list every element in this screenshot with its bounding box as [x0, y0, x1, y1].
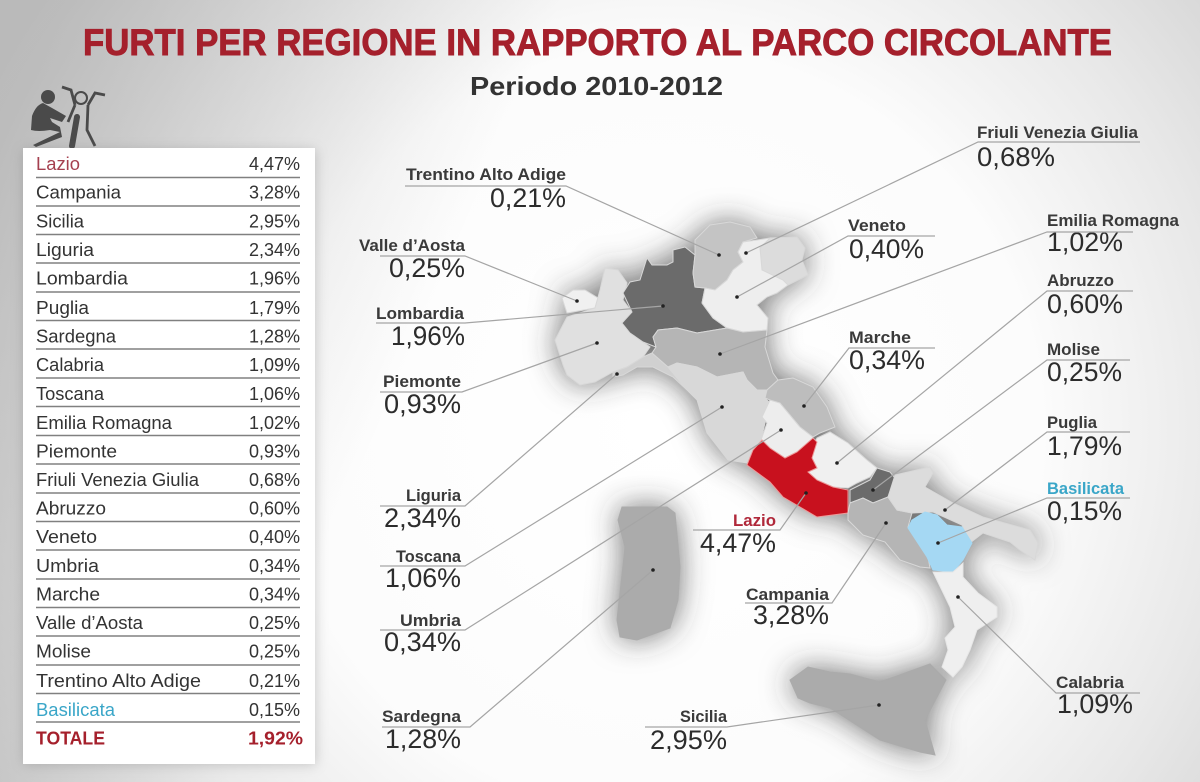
label: Lombardia [376, 304, 665, 351]
row: Puglia: 1,79% [249, 298, 300, 318]
row: Molise [36, 642, 300, 665]
row: Marche [36, 584, 300, 608]
label: Umbria [380, 428, 783, 657]
label: Veneto [735, 217, 935, 299]
row: Lombardia [36, 269, 300, 292]
label: Abruzzo [835, 272, 1133, 465]
label: Marche: Marche [849, 329, 911, 347]
row: Trentino Alto Adige [36, 671, 300, 694]
label: Campania: 3,28% [753, 600, 829, 630]
row: Valle d'Aosta: 0,25% [249, 613, 300, 633]
region: Liguria [613, 353, 687, 390]
row: Friuli Venezia Giulia: 0,68% [249, 470, 300, 490]
label: Lazio [693, 491, 808, 558]
label: Sicilia: Sicilia [680, 708, 728, 726]
label: Emilia Romagna: Emilia Romagna [1047, 212, 1180, 230]
region: Toscana [668, 363, 772, 463]
row: Piemonte [36, 442, 300, 464]
row: Umbria: 0,34% [249, 556, 300, 576]
row: Sardegna: Sardegna [36, 326, 117, 346]
row: Umbria [36, 556, 300, 579]
label: Trentino Alto Adige: Trentino Alto Adige [406, 166, 566, 184]
region: Veneto [702, 238, 788, 332]
region: Calabria [933, 563, 997, 677]
row: Campania: Campania [36, 183, 122, 203]
region: Trentino Alto Adige [693, 222, 757, 290]
label: Emilia Romagna: 1,02% [1047, 227, 1123, 257]
label: Valle d'Aosta [359, 237, 579, 303]
row: Basilicata: Basilicata [36, 700, 116, 720]
label: Lombardia: 1,96% [391, 321, 465, 351]
row: Liguria [36, 240, 300, 263]
row: Totale [36, 728, 303, 748]
row: Lazio: 4,47% [249, 154, 300, 174]
panel: ranking table [23, 148, 315, 764]
row: Toscana [36, 384, 300, 406]
map of Italy [555, 222, 1038, 755]
row: Veneto: Veneto [36, 527, 97, 547]
row: Abruzzo: 0,60% [249, 498, 300, 518]
label: Friuli Venezia Giulia: Friuli Venezia Giulia [977, 124, 1139, 142]
label: Sardegna: 1,28% [385, 724, 461, 754]
row: Toscana: 1,06% [249, 384, 300, 404]
label: Piemonte: 0,93% [384, 389, 461, 419]
region: Umbria [761, 400, 813, 458]
region: Sardegna [617, 507, 680, 640]
region: Emilia Romagna [652, 328, 778, 390]
row: Puglia [36, 298, 300, 320]
row: Basilicata: 0,15% [249, 700, 300, 720]
label: Basilicata: 0,15% [1047, 496, 1122, 526]
label: Trentino Alto Adige [405, 166, 721, 257]
row: Sicilia [36, 211, 300, 234]
label: Toscana: Toscana [396, 548, 462, 566]
row: Lazio: Lazio [36, 154, 80, 174]
label: Toscana: 1,06% [385, 563, 461, 593]
row: Calabria: Calabria [36, 355, 105, 375]
panel shadow [23, 150, 316, 765]
label: Calabria: 1,09% [1057, 689, 1133, 719]
label: Sicilia [645, 703, 881, 755]
row: Abruzzo [36, 498, 300, 522]
region: Friuli Venezia Giulia [760, 237, 808, 285]
label: Campania [745, 521, 888, 630]
row: Friuli Venezia Giulia [36, 470, 300, 493]
row: Emilia Romagna: 1,02% [249, 413, 300, 433]
label: Puglia: Puglia [1047, 414, 1098, 432]
row: Sicilia: 2,95% [249, 211, 300, 231]
title: FURTI PER REGIONE IN RAPPORTO AL PARCO CIRCOLANTE [83, 22, 1112, 63]
label: Umbria: 0,34% [384, 627, 461, 657]
label: Molise: 0,25% [1047, 357, 1122, 387]
label: Liguria: Liguria [406, 487, 462, 505]
label: Friuli Venezia Giulia: 0,68% [977, 142, 1055, 172]
label: Valle d'Aosta: Valle d’Aosta [359, 237, 466, 255]
region: Lazio [747, 438, 848, 517]
label: Lombardia: Lombardia [376, 305, 465, 323]
label: Lazio: 4,47% [700, 528, 776, 558]
row: Campania: 3,28% [249, 183, 300, 203]
label: Veneto: Veneto [848, 217, 906, 235]
label: Sardegna: Sardegna [382, 708, 462, 726]
label: Liguria [380, 372, 619, 533]
label: Calabria [956, 595, 1140, 719]
label: Trentino Alto Adige: 0,21% [490, 183, 566, 213]
label: Lazio: Lazio [733, 512, 776, 530]
label: Sicilia: 2,95% [650, 725, 727, 755]
row: Trentino Alto Adige: Trentino Alto Adige [36, 671, 201, 691]
row: Valle d'Aosta: Valle d’Aosta [36, 613, 144, 633]
region: Piemonte [555, 268, 650, 385]
region: Puglia [888, 467, 1038, 560]
label: Friuli Venezia Giulia [744, 124, 1140, 255]
map shadow [555, 222, 1038, 755]
row: Emilia Romagna: Emilia Romagna [36, 413, 173, 433]
row: Abruzzo: Abruzzo [36, 498, 106, 518]
row: Sardegna: 1,28% [249, 326, 300, 346]
region: Basilicata [908, 512, 972, 572]
label: Piemonte [380, 341, 599, 419]
subtitle: Periodo 2010-2012 [470, 71, 723, 101]
region: Valle d'Aosta [562, 290, 598, 313]
row: Molise: 0,25% [249, 642, 300, 662]
label: Liguria: 2,34% [384, 503, 461, 533]
icon: thief stealing a motorbike [31, 87, 105, 147]
row: Lombardia: Lombardia [36, 269, 129, 289]
row: Trentino Alto Adige: 0,21% [249, 671, 300, 691]
label: Molise: Molise [1047, 341, 1100, 359]
row: Valle d'Aosta [36, 613, 300, 636]
row: Veneto: 0,40% [249, 527, 300, 547]
region: Molise [850, 468, 895, 503]
row: Campania [36, 183, 300, 206]
label: Marche [802, 329, 935, 408]
row: Calabria [36, 355, 300, 378]
label: Umbria: Umbria [400, 612, 462, 630]
label: Puglia [943, 414, 1130, 512]
row: Marche: Marche [36, 584, 100, 604]
label: Puglia: 1,79% [1047, 431, 1122, 461]
row: Toscana: Toscana [36, 384, 105, 404]
row: Piemonte: Piemonte [36, 442, 117, 462]
region: Abruzzo [808, 432, 877, 488]
label: Sardegna [382, 568, 655, 754]
label: Valle d'Aosta: 0,25% [389, 253, 465, 283]
row: Basilicata [36, 700, 300, 722]
row: Marche: 0,34% [249, 584, 300, 604]
row: Totale: 1,92% [248, 728, 303, 748]
row: Sicilia: Sicilia [36, 211, 85, 231]
row: Veneto [36, 527, 300, 550]
row: Friuli Venezia Giulia: Friuli Venezia Giulia [36, 470, 200, 490]
label: Emilia Romagna [718, 212, 1180, 356]
row: Liguria: 2,34% [249, 240, 300, 260]
label: Calabria: Calabria [1056, 674, 1125, 692]
row: Piemonte: 0,93% [249, 442, 300, 462]
label: Abruzzo: 0,60% [1047, 289, 1123, 319]
label: Piemonte: Piemonte [383, 373, 461, 391]
label: Marche: 0,34% [849, 345, 925, 375]
region: Marche [765, 378, 835, 437]
label: Basilicata: Basilicata [1047, 480, 1125, 498]
row: Calabria: 1,09% [249, 355, 300, 375]
row: Emilia Romagna [36, 413, 300, 436]
label: Campania: Campania [746, 586, 830, 604]
row: Lazio [36, 154, 300, 178]
label: Molise [871, 341, 1130, 492]
row: Puglia: Puglia [36, 298, 90, 318]
row: Totale: TOTALE [36, 728, 105, 748]
row: Sardegna [36, 326, 300, 349]
label: Basilicata [936, 480, 1130, 545]
label: Toscana [380, 405, 724, 593]
region: Sicilia [790, 664, 946, 755]
region: Lombardia [622, 247, 727, 347]
label: Veneto: 0,40% [849, 234, 924, 264]
region: Campania [848, 497, 930, 568]
label: Abruzzo: Abruzzo [1047, 272, 1114, 290]
row: Umbria: Umbria [36, 556, 100, 576]
row: Liguria: Liguria [36, 240, 95, 260]
row: Molise: Molise [36, 642, 91, 662]
row: Lombardia: 1,96% [249, 269, 300, 289]
